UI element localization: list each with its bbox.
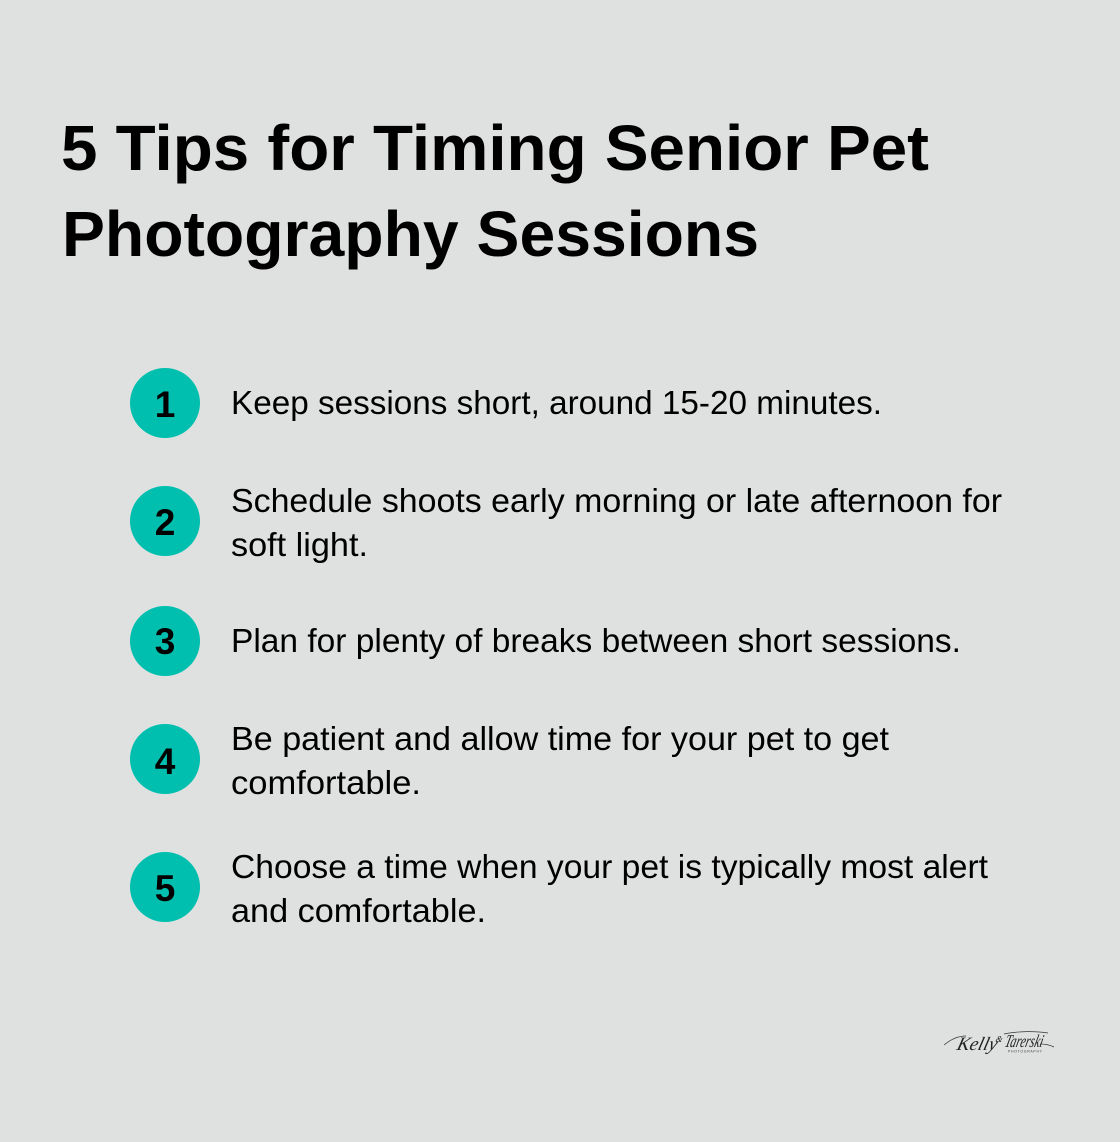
tip 3 text: Plan for plenty of breaks between short sessions. bbox=[231, 622, 961, 659]
tip 4 text: comfortable. bbox=[231, 764, 421, 801]
tip 2 text: soft light. bbox=[231, 526, 368, 563]
tip 5 bbox=[130, 848, 988, 929]
tip 2 text: Schedule shoots early morning or late afternoon for bbox=[231, 482, 1002, 519]
signature logo: PHOTOGRAPHY bbox=[1008, 1050, 1043, 1054]
number badge 5 bbox=[130, 852, 200, 922]
number badge 2: 2 bbox=[155, 502, 175, 543]
signature logo: Kelly bbox=[954, 1034, 1000, 1055]
tip 2 bbox=[130, 482, 1002, 563]
title bbox=[61, 112, 929, 270]
tip 3 bbox=[130, 606, 961, 676]
tip 5 text: Choose a time when your pet is typically most alert bbox=[231, 848, 988, 885]
number badge 5: 5 bbox=[155, 868, 175, 909]
number badge 4 bbox=[130, 724, 200, 794]
number badge 1 bbox=[130, 368, 200, 438]
signature logo bbox=[944, 1031, 1054, 1055]
number badge 1: 1 bbox=[155, 384, 175, 425]
tip 4 text bbox=[231, 720, 889, 801]
title: 5 Tips for Timing Senior Pet bbox=[61, 112, 929, 184]
title: Photography Sessions bbox=[62, 198, 759, 270]
tip 1 bbox=[130, 368, 882, 438]
tip 4 bbox=[130, 720, 889, 801]
tip 1 text: Keep sessions short, around 15-20 minutes. bbox=[231, 384, 882, 421]
tip 4 text: Be patient and allow time for your pet to get bbox=[231, 720, 889, 757]
number badge 3 bbox=[130, 606, 200, 676]
number badge 4: 4 bbox=[155, 741, 176, 782]
signature logo: & bbox=[995, 1034, 1005, 1044]
number badge 3: 3 bbox=[155, 621, 175, 662]
tip 5 text: and comfortable. bbox=[231, 892, 486, 929]
tip 5 text bbox=[231, 848, 988, 929]
signature logo: Tarerski bbox=[1003, 1031, 1046, 1051]
number badge 2 bbox=[130, 486, 200, 556]
tip 2 text bbox=[231, 482, 1002, 563]
